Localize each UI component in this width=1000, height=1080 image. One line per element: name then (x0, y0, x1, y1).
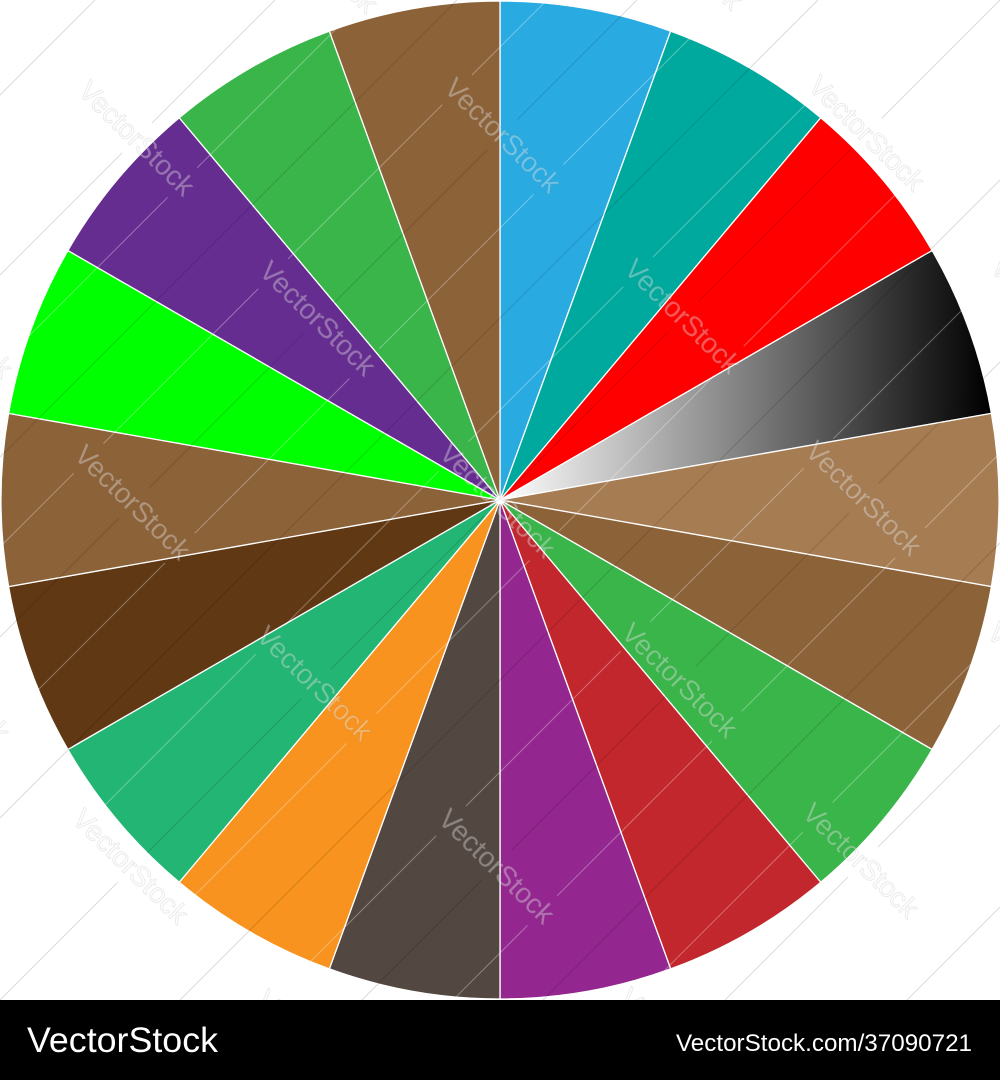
watermark: repeated VectorStock text: VectorStock (254, 255, 383, 382)
footer logo text: VectorStock (27, 1021, 219, 1060)
slice 12: emerald (68, 500, 500, 882)
slice 9: purple (500, 500, 671, 999)
slice 18: brown (329, 1, 500, 500)
watermark: repeated VectorStock text: VectorStock (803, 70, 932, 197)
slice 15: bright green (9, 250, 500, 500)
watermark: repeated VectorStock text: VectorStock (433, 803, 562, 930)
slice 3: red (500, 118, 932, 500)
footer image id text: VectorStock.com/37090721 (676, 1030, 972, 1057)
slice 6: brown (500, 500, 991, 750)
footer bar (0, 1000, 1000, 1080)
watermark: repeated VectorStock text: VectorStock (73, 75, 202, 202)
watermark: repeated VectorStock text: VectorStock (619, 253, 748, 380)
watermark: repeated VectorStock text: VectorStock (800, 435, 929, 562)
watermark: repeated VectorStock text: VectorStock (69, 439, 198, 566)
slice 4: white to black gradient (500, 250, 991, 500)
watermark: repeated VectorStock text: VectorStock (439, 72, 568, 199)
watermark: repeated VectorStock text: VectorStock (251, 620, 380, 747)
slice 8: crimson (500, 500, 821, 969)
slice 16: violet (68, 118, 500, 500)
slice 5: light brown (500, 413, 999, 587)
slice 7: green (500, 500, 932, 882)
slice 1: sky blue (500, 1, 671, 500)
slice 14: medium brown (1, 413, 500, 587)
watermark: repeated VectorStock text: VectorStock (616, 617, 745, 744)
slice 11: orange (179, 500, 500, 969)
slice 17: green (179, 31, 500, 500)
watermark: repeated VectorStock text: VectorStock (797, 797, 926, 924)
slice 10: dark taupe (329, 500, 500, 999)
slice 2: teal (500, 31, 821, 500)
watermark: repeated VectorStock text: VectorStock (67, 803, 196, 930)
watermark: repeated VectorStock text: VectorStock (434, 437, 563, 564)
slice 13: dark brown (9, 500, 500, 750)
